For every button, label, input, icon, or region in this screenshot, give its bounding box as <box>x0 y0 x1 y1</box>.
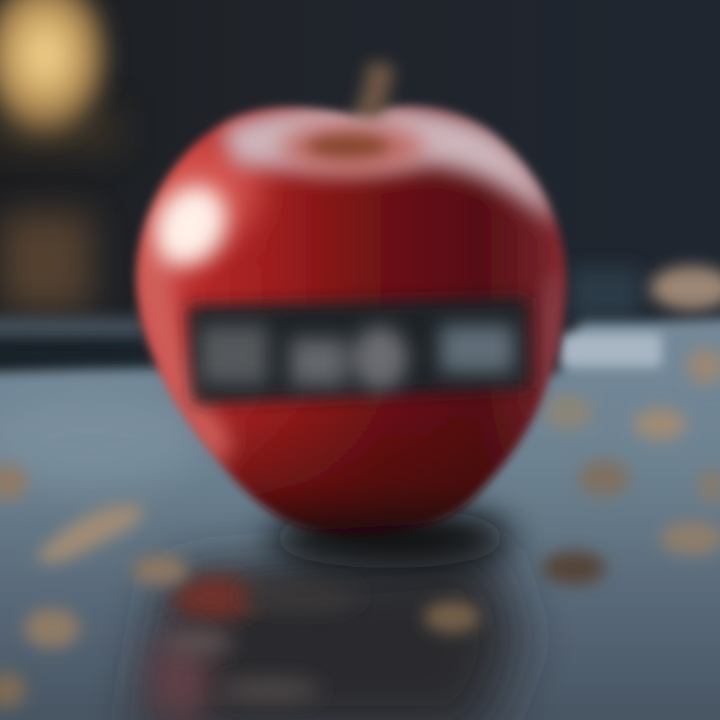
scattered grains on table <box>0 266 720 708</box>
apple top pink around cavity <box>280 122 424 174</box>
apple reflection on table <box>132 550 520 720</box>
apple lower shading <box>213 405 532 540</box>
apple top shine band <box>220 104 556 225</box>
apple specular highlight <box>140 173 240 279</box>
apple stem cavity <box>306 134 390 158</box>
apple left rim light <box>136 250 232 470</box>
apple <box>120 104 590 535</box>
background: warm lamp glow <box>0 0 120 312</box>
apple body <box>136 105 566 534</box>
apple contact shadow <box>270 508 510 568</box>
apple right edge tint <box>540 270 564 430</box>
background: shelf ledge <box>0 268 640 368</box>
apple label band <box>188 298 530 404</box>
apple stem <box>350 63 394 118</box>
table surface <box>0 318 720 720</box>
apple upper left glow <box>150 140 260 240</box>
blurred label lettering <box>200 325 514 390</box>
